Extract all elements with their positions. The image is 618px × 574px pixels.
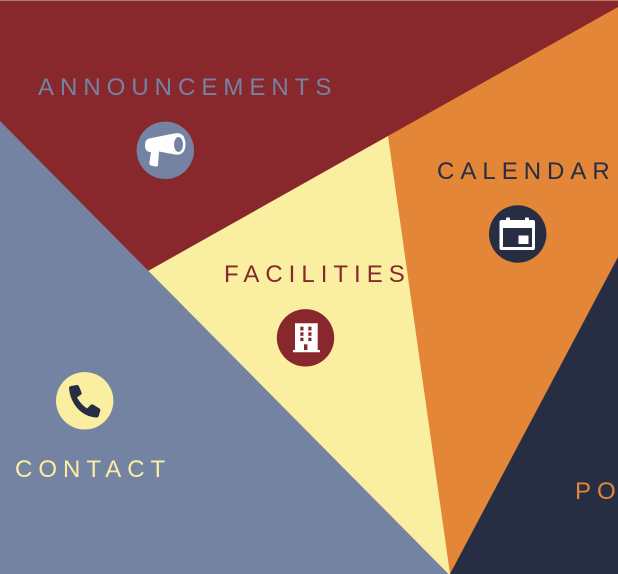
- icon: calendar: [489, 205, 546, 263]
- icon: phone: [56, 372, 113, 429]
- panel: policies: [450, 257, 618, 574]
- panel: announcements: [0, 0, 618, 277]
- icon: megaphone: [137, 122, 194, 179]
- panel: facilities: [143, 136, 450, 574]
- panel: contact: [0, 121, 448, 574]
- panel: calendar: [385, 7, 618, 574]
- heading: announcements: ANNOUNCEMENTS: [38, 74, 337, 101]
- heading: contact: CONTACT: [15, 456, 171, 483]
- icon: building: [277, 309, 334, 366]
- heading: calendar: CALENDAR: [437, 158, 616, 185]
- heading: facilities: FACILITIES: [224, 261, 411, 288]
